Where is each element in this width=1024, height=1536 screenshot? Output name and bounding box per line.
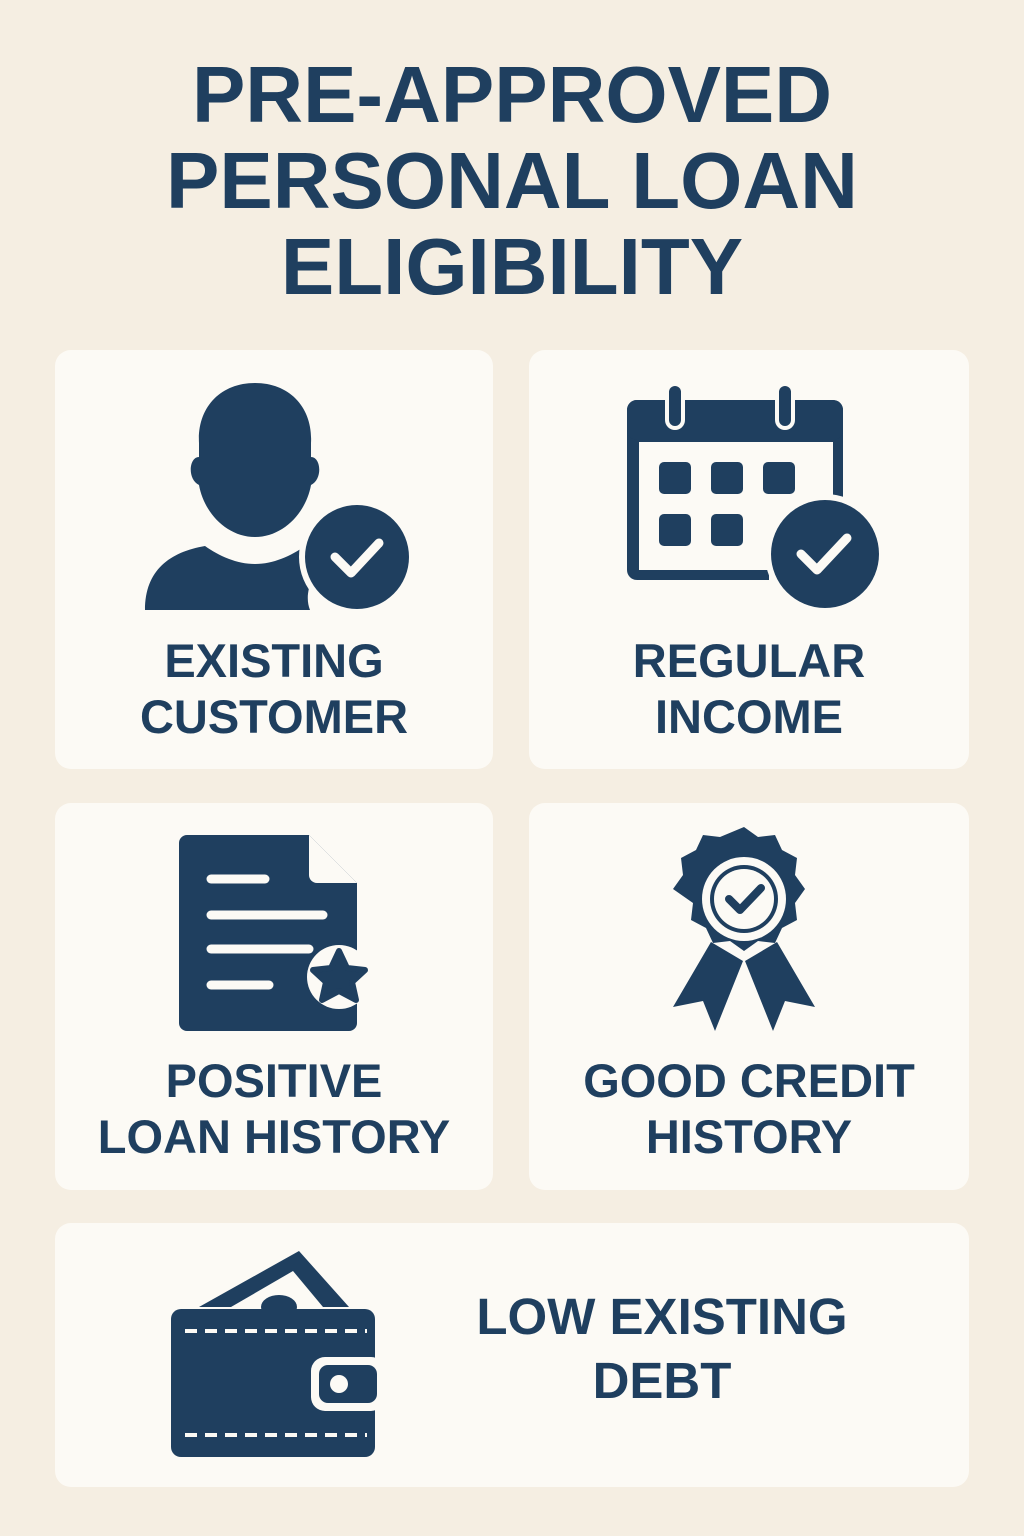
- icon: wallet with cash: [171, 1251, 377, 1457]
- panel: existing customer: [55, 350, 493, 769]
- label: [140, 634, 408, 743]
- panel: low existing debt: [55, 1223, 969, 1487]
- label: [476, 1288, 848, 1409]
- label: CUSTOMER: [140, 690, 408, 743]
- label: LOAN HISTORY: [98, 1110, 450, 1163]
- title: ELIGIBILITY: [281, 222, 743, 311]
- title: PRE-APPROVED: [192, 50, 832, 139]
- panel: positive loan history: [55, 803, 493, 1190]
- label: LOW EXISTING: [476, 1288, 848, 1345]
- label: [98, 1054, 450, 1163]
- icon: award ribbon: [673, 827, 815, 1031]
- label: [583, 1054, 915, 1163]
- label: HISTORY: [646, 1110, 852, 1163]
- label: INCOME: [655, 690, 843, 743]
- label: POSITIVE: [166, 1054, 382, 1107]
- title: [166, 50, 858, 311]
- icon: calendar with check: [627, 386, 879, 608]
- label: GOOD CREDIT: [583, 1054, 915, 1107]
- icon: document with star: [179, 835, 368, 1031]
- label: REGULAR: [633, 634, 865, 687]
- label: EXISTING: [164, 634, 384, 687]
- icon: person with check: [144, 383, 409, 610]
- panel: regular income: [529, 350, 969, 769]
- title: PERSONAL LOAN: [166, 136, 858, 225]
- label: [633, 634, 865, 743]
- panel: good credit history: [529, 803, 969, 1190]
- label: DEBT: [593, 1352, 731, 1409]
